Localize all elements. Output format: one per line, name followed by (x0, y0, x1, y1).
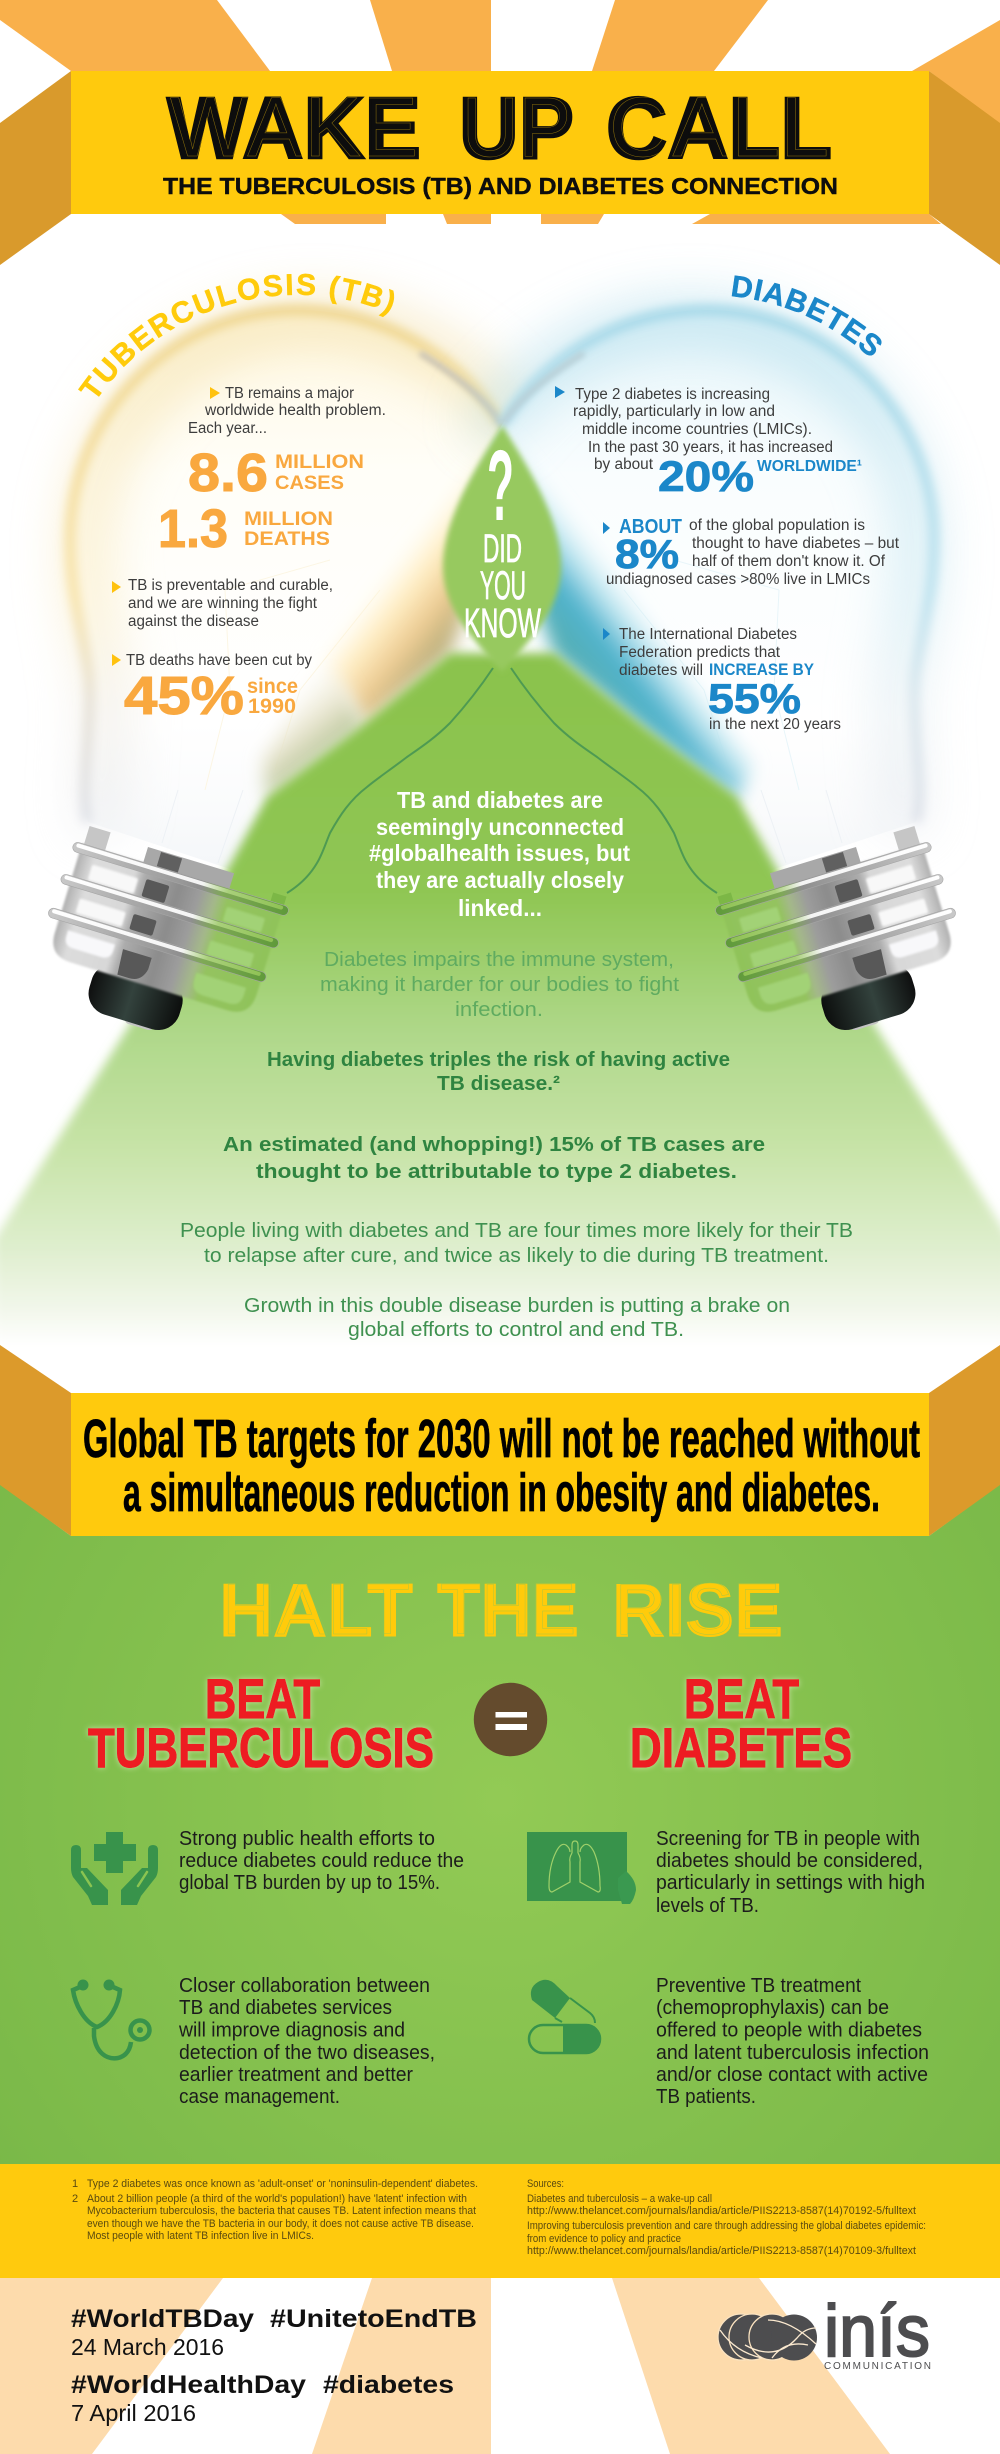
text: screening: levels of TB. (656, 1895, 759, 1917)
hashtags: world TB day: #UnitetoEndTB (270, 2305, 477, 2333)
text: public health efforts: Strong public health efforts to (179, 1828, 435, 1850)
text: preventive treatment: and latent tuberculosis infection (656, 2042, 929, 2064)
heading: beat tuberculosis (88, 1667, 434, 1779)
text: double burden: global efforts to control and end TB. (348, 1319, 684, 1341)
arrow bullet (210, 387, 220, 399)
footer rays (0, 2278, 890, 2454)
right light bulb glass (443, 310, 934, 888)
heading: halt the rise: THE (440, 1570, 576, 1650)
stat: 1.3 million deaths: DEATHS (244, 529, 330, 550)
heading: halt the rise: RISE (615, 1570, 780, 1650)
connection intro text: TB and diabetes are (397, 787, 603, 813)
stat: about 8 percent: 8% (615, 531, 679, 577)
green panel background (0, 1484, 1000, 2164)
text: collaboration: case management. (179, 2086, 340, 2108)
title: CALL (606, 80, 832, 177)
text: preventive treatment: (chemoprophylaxis) can be (656, 1997, 889, 2019)
stat: 45 percent since 1990: 1990 (248, 695, 296, 718)
curved heading: diabetes: DIABETES (732, 275, 882, 356)
hashtags: world health day: 7 April 2016 (71, 2400, 196, 2426)
arrow bullet (603, 628, 610, 640)
arrow bullet (555, 386, 565, 398)
did you know (464, 430, 541, 646)
footnotes: Type 2 diabetes was once known as 'adult-onset' or 'noninsulin-dependent' diabetes. (87, 2178, 478, 2190)
hashtags: world TB day: 24 March 2016 (71, 2334, 224, 2360)
sources: Sources: (527, 2178, 564, 2190)
icon: chest x-ray lungs (527, 1832, 636, 1904)
text block: TB intro (188, 385, 386, 437)
text: deaths cut: TB deaths have been cut by (126, 652, 312, 669)
connection intro text: seemingly unconnected (376, 814, 624, 840)
stat: 20 percent worldwide (658, 453, 862, 501)
sources (527, 2178, 926, 2257)
text: collaboration: will improve diagnosis and (178, 2020, 405, 2042)
title: WAKE (167, 80, 421, 177)
left bulb socket (24, 822, 295, 1059)
sources: Improving tuberculosis prevention and care through addressing the global diabetes epidemic: (527, 2220, 926, 2232)
stat: 45 percent since 1990: 45% (124, 666, 244, 726)
text: immune system: Diabetes impairs the immune system, (324, 949, 674, 971)
title banner folds (0, 71, 1000, 265)
stat: 20 percent worldwide: WORLDWIDE¹ (757, 458, 862, 475)
text: immune system: making it harder for our bodies to fight (320, 974, 679, 996)
footnotes: 1 (72, 2178, 78, 2190)
right bulb socket (709, 822, 980, 1059)
text: immune system: infection. (455, 999, 543, 1021)
left light bulb glass (70, 310, 561, 888)
title: UP (459, 80, 574, 177)
stat: about 8 percent (615, 516, 682, 577)
text block: IDF: Federation predicts that (619, 644, 781, 661)
logo: Inis Communication: COMMUNICATION (824, 2361, 931, 2372)
stat: 8.6 million cases: 8.6 (188, 443, 268, 503)
text block: global population: undiagnosed cases >80% live in LMICs (606, 571, 870, 588)
text block: global population: of the global population is (689, 517, 865, 534)
did you know: DID (483, 527, 522, 571)
text block: type 2 increasing: middle income countries (LMICs). (582, 421, 812, 438)
orange glow wedge (262, 430, 502, 800)
title inline detail: WAKE (170, 80, 418, 174)
heading: beat diabetes: BEAT (684, 1667, 799, 1730)
stat: increase by 55 percent: in the next 20 years (709, 716, 841, 733)
stat: 8.6 million cases (188, 443, 364, 503)
title inline detail: UP (462, 80, 571, 174)
text block: preventable: and we are winning the fight (128, 595, 318, 612)
text: immune system (320, 949, 679, 1021)
stat: increase by 55 percent: 55% (708, 675, 801, 722)
text block: TB intro: TB remains a major (225, 385, 354, 402)
subtitle: THE TUBERCULOSIS (TB) AND DIABETES CONNECTION (163, 173, 838, 199)
connection intro text: they are actually closely (376, 867, 624, 893)
text: public health efforts: global TB burden by up to 15%. (179, 1872, 440, 1894)
text: triples the risk (267, 1049, 730, 1095)
title (167, 80, 832, 177)
text block: global population (606, 517, 900, 588)
text: relapse: to relapse after cure, and twice as likely to die during TB treatment. (204, 1245, 829, 1267)
stat: increase by 55 percent (708, 661, 841, 733)
text: public health efforts (179, 1828, 464, 1894)
text block: IDF: diabetes will (619, 662, 703, 679)
hashtags: world TB day (71, 2305, 477, 2360)
targets banner (71, 1393, 929, 1536)
heading: halt the rise: HALT (219, 1568, 413, 1652)
connection intro text: #globalhealth issues, but (369, 840, 630, 866)
heading: beat tuberculosis: TUBERCULOSIS (88, 1716, 434, 1779)
green lens overlap (443, 425, 561, 672)
text: preventive treatment: offered to people with diabetes (656, 2020, 922, 2042)
text block: type 2 increasing: by about (594, 456, 654, 473)
text: double burden: Growth in this double disease burden is putting a brake on (244, 1295, 790, 1317)
arrow bullet (603, 522, 610, 534)
text: 15 percent attributable: thought to be attributable to type 2 diabetes. (256, 1161, 737, 1183)
footnotes: even though we have the TB bacteria in our body, it does not cause active TB disease. (87, 2218, 474, 2230)
heading: halt the rise: RISE (612, 1568, 783, 1652)
hashtags: world health day: #WorldHealthDay (71, 2371, 306, 2399)
green beam of light (0, 653, 1000, 1345)
text block: type 2 increasing (573, 386, 833, 473)
text: preventive treatment: TB patients. (656, 2086, 756, 2108)
text: preventive treatment: Preventive TB treatment (656, 1975, 861, 1997)
text block: IDF: The International Diabetes (619, 626, 797, 643)
stat: about 8 percent: ABOUT (619, 516, 682, 538)
did you know: ? (487, 430, 514, 542)
title banner (71, 71, 929, 214)
text block: type 2 increasing: In the past 30 years, it has increased (588, 439, 833, 456)
footnotes (72, 2178, 478, 2242)
did you know: YOU (480, 564, 526, 608)
text block: IDF (619, 626, 797, 679)
diabetes facts (555, 386, 900, 733)
stat: 8.6 million cases: MILLION (275, 452, 364, 473)
text: 15 percent attributable (223, 1134, 765, 1183)
stat: 8.6 million cases: CASES (275, 473, 344, 494)
text: preventive treatment: and/or close contact with active (656, 2064, 928, 2086)
heading: beat diabetes: DIABETES (630, 1716, 852, 1779)
stat: 1.3 million deaths: MILLION (244, 509, 333, 530)
stat: 45 percent since 1990 (124, 666, 298, 726)
arrow bullet (112, 654, 121, 666)
hashtags: world health day (71, 2371, 454, 2426)
text block: global population: half of them don't know it. Of (692, 553, 886, 570)
footnotes: Most people with latent TB infection live in LMICs. (87, 2230, 314, 2242)
text block: TB intro: worldwide health problem. (204, 402, 386, 419)
text: collaboration: Closer collaboration between (179, 1975, 430, 1997)
text: relapse: People living with diabetes and TB are four times more likely for their TB (180, 1220, 853, 1242)
footnotes strip (0, 2164, 1000, 2278)
text block: preventable: against the disease (128, 613, 259, 630)
footnotes: Mycobacterium tuberculosis, the bacteria that causes TB. Latent infection means that (87, 2205, 476, 2217)
connection intro text: linked... (458, 895, 542, 921)
text: screening: diabetes should be considered, (656, 1850, 923, 1872)
TB facts (112, 385, 386, 726)
top sunburst rays (0, 0, 1000, 224)
hashtags: world TB day: #WorldTBDay (71, 2305, 254, 2333)
text: collaboration: detection of the two diseases, (179, 2042, 435, 2064)
text: collaboration (178, 1975, 435, 2108)
sources: http://www.thelancet.com/journals/landia/article/PIIS2213-8587(14)70192-5/fulltext (527, 2205, 916, 2217)
equals sign (474, 1683, 547, 1756)
sources: http://www.thelancet.com/journals/landia/article/PIIS2213-8587(14)70109-3/fulltext (527, 2245, 916, 2257)
text: screening: Screening for TB in people with (656, 1828, 920, 1850)
icon: stethoscope (73, 1980, 150, 2058)
title inline detail: CALL (609, 80, 829, 174)
heading: halt the rise: THE (437, 1568, 579, 1652)
bulb outline lines (287, 668, 717, 893)
text block: preventable: TB is preventable and curable, (128, 577, 333, 594)
stat: 20 percent worldwide: 20% (658, 453, 754, 501)
heading: halt the rise: HALT (222, 1570, 410, 1650)
heading: halt the rise (219, 1568, 783, 1652)
blue glow wedge (502, 430, 754, 800)
text block: type 2 increasing: Type 2 diabetes is increasing (575, 386, 770, 403)
text: triples the risk: Having diabetes triples the risk of having active (267, 1049, 730, 1071)
stat: increase by 55 percent: INCREASE BY (709, 661, 814, 679)
connection intro text (369, 787, 630, 921)
text: double burden (244, 1295, 790, 1341)
text block: preventable (128, 577, 333, 630)
logo: Inis Communication: inís (824, 2291, 930, 2372)
stat: 1.3 million deaths (158, 499, 333, 559)
icon: pills (529, 1980, 601, 2054)
curved heading: tuberculosis: TUBERCULOSIS (TB) (78, 274, 394, 397)
title inline detail (170, 80, 829, 174)
text: triples the risk: TB disease.² (437, 1073, 560, 1095)
targets banner folds (0, 1345, 1000, 1536)
stat: 1.3 million deaths: 1.3 (158, 499, 228, 559)
stat: 45 percent since 1990: since (247, 675, 298, 698)
arrow bullet (112, 581, 121, 593)
text: collaboration: earlier treatment and better (179, 2064, 413, 2086)
text: relapse (180, 1220, 853, 1267)
text block: type 2 increasing: rapidly, particularly in low and (573, 403, 775, 420)
text: 15 percent attributable: An estimated (and whopping!) 15% of TB cases are (223, 1134, 765, 1156)
text: preventive treatment (656, 1975, 929, 2108)
footnotes: 2 (72, 2193, 78, 2205)
heading: beat tuberculosis: BEAT (205, 1667, 320, 1730)
text: screening: particularly in settings with high (656, 1872, 925, 1894)
text: screening (656, 1828, 925, 1917)
text: public health efforts: reduce diabetes could reduce the (179, 1850, 464, 1872)
sources: from evidence to policy and practice (527, 2233, 681, 2245)
heading: beat diabetes (630, 1667, 852, 1779)
text block: TB intro: Each year... (188, 420, 267, 437)
sources: Diabetes and tuberculosis – a wake-up call (527, 2193, 712, 2205)
icon: hands with medical cross (71, 1832, 158, 1905)
footnotes: About 2 billion people (a third of the world's population!) have 'latent' infection with (87, 2193, 467, 2205)
text: collaboration: TB and diabetes services (179, 1997, 392, 2019)
text block: global population: thought to have diabetes – but (692, 535, 900, 552)
did you know: KNOW (464, 600, 541, 646)
hashtags: world health day: #diabetes (323, 2371, 454, 2399)
logo: Inis Communication (718, 2291, 931, 2372)
